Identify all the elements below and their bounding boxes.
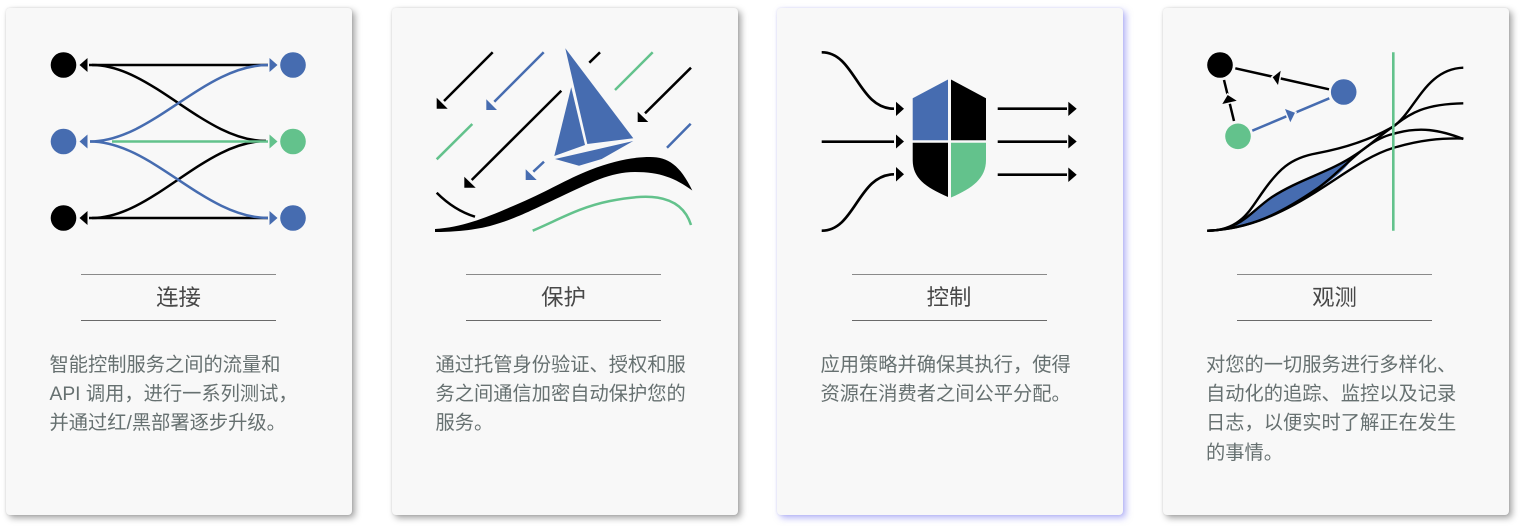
heading: secure	[466, 274, 661, 321]
icon: sailboat in wind and waves	[435, 48, 692, 232]
heading: observe	[1237, 274, 1432, 321]
text: observe description: 的事情。	[1206, 443, 1283, 464]
text: connect description	[50, 354, 298, 434]
heading: control: 控制	[927, 285, 971, 310]
panel: control	[777, 8, 1123, 515]
panel: connect	[6, 8, 352, 515]
text: control description: 应用策略并确保其执行，使得	[820, 355, 1071, 376]
panel: secure	[392, 8, 738, 515]
icon: shield with flow arrows	[822, 51, 1077, 232]
text: secure description	[436, 354, 686, 434]
text: connect description: 并通过红/黑部署逐步升级。	[50, 413, 286, 434]
heading: connect: 连接	[156, 285, 201, 310]
text: secure description: 务之间通信加密自动保护您的	[436, 384, 686, 405]
text: observe description: 对您的一切服务进行多样化、	[1206, 355, 1456, 376]
heading: connect	[81, 274, 276, 321]
icon: traffic routing network	[50, 52, 306, 231]
text: control description: 资源在消费者之间公平分配。	[820, 384, 1071, 405]
text: secure description: 服务。	[436, 413, 493, 434]
heading: secure: 保护	[541, 285, 586, 310]
heading: control	[852, 274, 1046, 321]
text: observe description: 自动化的追踪、监控以及记录	[1206, 384, 1456, 405]
text: secure description: 通过托管身份验证、授权和服	[436, 355, 686, 376]
heading: observe: 观测	[1312, 285, 1357, 310]
icon: service graph and latency curves	[1207, 52, 1464, 232]
text: connect description: API 调用，进行一系列测试，	[50, 384, 298, 405]
panel: observe	[1163, 8, 1509, 515]
text: connect description: 智能控制服务之间的流量和	[50, 355, 280, 376]
text: observe description: 日志，以便实时了解正在发生	[1206, 413, 1456, 434]
text: observe description	[1206, 354, 1456, 464]
text: control description	[820, 354, 1071, 405]
